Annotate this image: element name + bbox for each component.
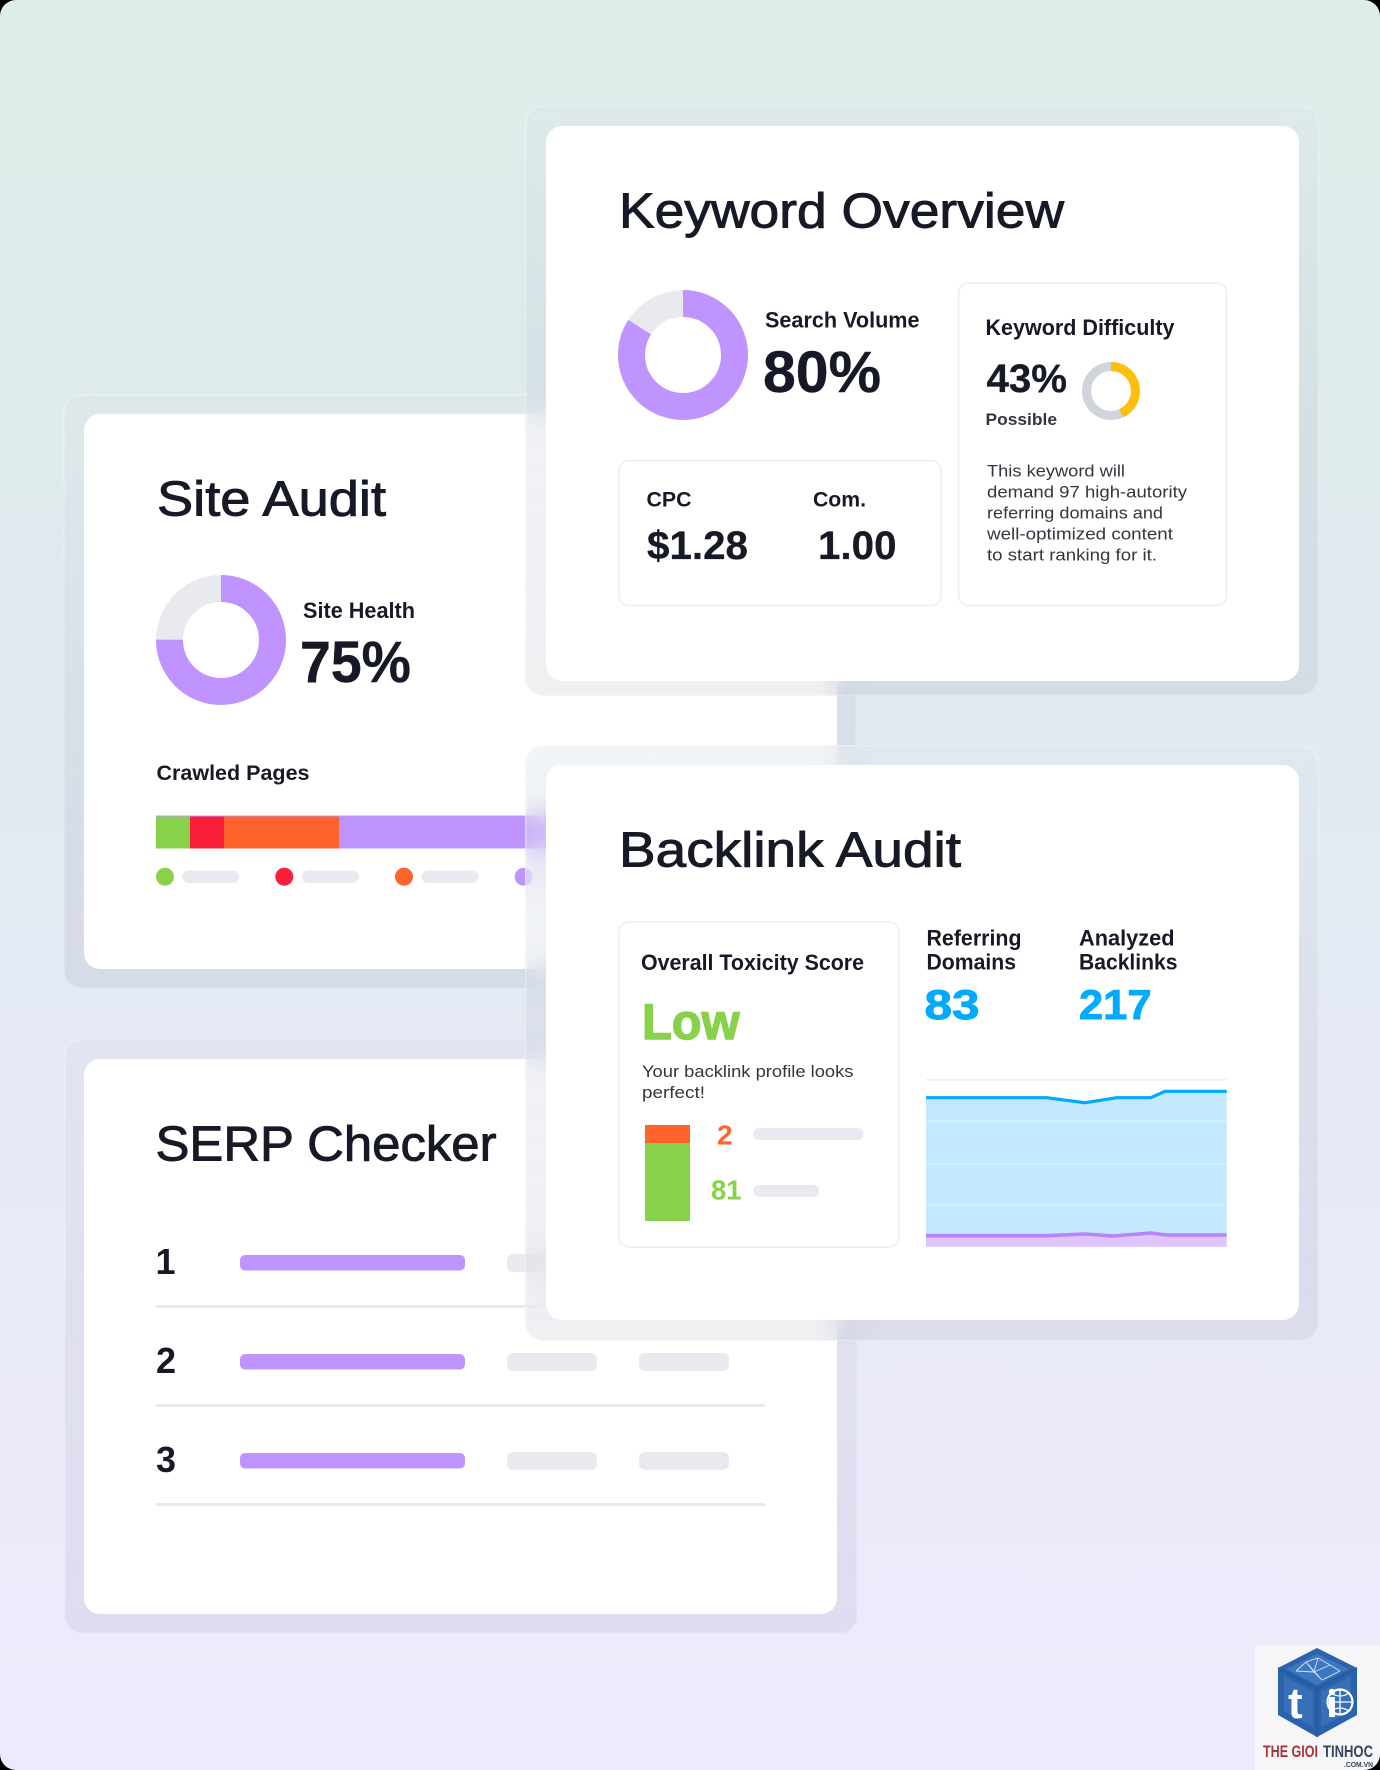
box: keyword difficulty: Keyword Difficulty <box>986 315 1175 340</box>
box: keyword difficulty: referring domains and <box>987 504 1163 523</box>
label: site health: Site Health <box>303 598 415 623</box>
box: cpc and competition: Com. <box>813 488 866 512</box>
box: keyword difficulty: well-optimized content <box>986 525 1173 544</box>
box: keyword difficulty: to start ranking for it. <box>987 546 1157 565</box>
value: 80%: 80% <box>763 340 881 405</box>
box: cpc and competition: 1.00 <box>818 524 896 568</box>
stat: analyzed backlinks <box>1079 926 1178 1028</box>
backlink audit card <box>546 765 1299 1320</box>
heading: keyword overview: Keyword Overview <box>619 184 1065 238</box>
label: search volume: Search Volume <box>765 308 920 332</box>
wordmark: .COM.VN <box>1344 1762 1373 1769</box>
stacked bar: crawled pages <box>156 816 765 848</box>
box: overall toxicity score: perfect! <box>642 1083 705 1102</box>
box: overall toxicity score: Overall Toxicity Score <box>641 950 864 975</box>
panel: backlink audit <box>525 745 1319 1341</box>
stat: analyzed backlinks: Analyzed <box>1079 926 1174 950</box>
heading: serp checker: SERP Checker <box>156 1118 496 1172</box>
panel: serp checker <box>64 1039 858 1634</box>
serp checker card <box>84 1059 837 1614</box>
box: overall toxicity score: 81 <box>711 1174 742 1206</box>
panel: site audit <box>63 394 857 989</box>
heading: backlink audit: Backlink Audit <box>619 824 961 878</box>
row 1 <box>156 1241 765 1308</box>
box: keyword difficulty: demand 97 high-autority <box>987 483 1188 502</box>
stat: referring domains <box>924 926 1022 1028</box>
box: keyword difficulty: This keyword will <box>987 462 1125 481</box>
stat: analyzed backlinks: Backlinks <box>1079 950 1178 974</box>
row 3: 3 <box>156 1439 176 1480</box>
row 2 <box>156 1340 765 1407</box>
heading: site audit: Site Audit <box>157 472 386 526</box>
legend: crawled pages <box>156 868 598 886</box>
keyword overview card <box>546 126 1299 681</box>
value: 75%: 75% <box>300 630 411 695</box>
wordmark <box>1263 1742 1373 1769</box>
donut chart: site health 75% <box>170 588 272 692</box>
box: keyword difficulty <box>958 283 1226 606</box>
row 2: 2 <box>156 1340 176 1381</box>
logo: the gioi tinhoc <box>1255 1645 1380 1770</box>
box: cpc and competition <box>619 460 941 606</box>
box: overall toxicity score: Your backlink profile looks <box>642 1062 854 1081</box>
site audit card <box>84 414 837 969</box>
box: cpc and competition: $1.28 <box>647 524 748 568</box>
box: keyword difficulty: 43% <box>986 357 1067 401</box>
row 3 <box>156 1439 765 1506</box>
stat: referring domains: 83 <box>924 981 980 1028</box>
stat: analyzed backlinks: 217 <box>1079 981 1152 1028</box>
stat: referring domains: Referring <box>926 926 1022 950</box>
box: overall toxicity score: 2 <box>717 1120 733 1150</box>
row 1: 1 <box>156 1241 176 1282</box>
wordmark: THE GIOI <box>1263 1742 1318 1761</box>
label: crawled pages: Crawled Pages <box>156 762 310 785</box>
box: overall toxicity score <box>619 922 899 1247</box>
box: cpc and competition: CPC <box>646 488 692 512</box>
box: overall toxicity score: Low <box>642 994 740 1050</box>
icon: cube: t <box>1288 1679 1303 1728</box>
donut chart: search volume <box>632 304 734 406</box>
panel: keyword overview <box>525 105 1319 696</box>
stat: referring domains: Domains <box>926 950 1016 974</box>
area chart: backlinks over time <box>926 1079 1227 1247</box>
box: keyword difficulty: Possible <box>986 410 1057 429</box>
